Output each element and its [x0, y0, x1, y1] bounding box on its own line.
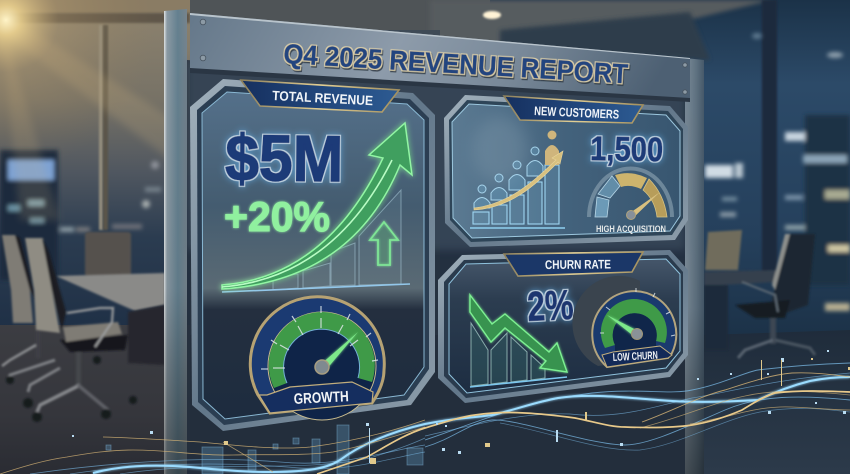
display stand posts — [164, 9, 704, 474]
value: +20%: +20% — [224, 193, 330, 240]
data particles — [72, 350, 846, 463]
bar chart: declining bars — [471, 323, 545, 386]
panel: new customers — [444, 95, 688, 247]
banner: new customers — [504, 96, 643, 123]
gauge: high acquisition — [589, 168, 672, 235]
title: Q4 2025 REVENUE REPORT — [283, 38, 629, 89]
bar chart: customer growth with people icons — [470, 130, 565, 228]
glass board behind panels — [187, 60, 685, 474]
blue streams — [30, 363, 850, 474]
floor — [0, 325, 190, 474]
bar chart: growth bars — [273, 190, 401, 290]
panel: total revenue — [190, 79, 435, 431]
left post — [164, 9, 187, 474]
chair rear — [2, 235, 40, 366]
value: 2%: 2% — [526, 281, 574, 330]
banner: new customers: NEW CUSTOMERS — [534, 104, 619, 122]
plate bolts — [200, 19, 687, 94]
blurred city lights right — [705, 33, 850, 311]
arrow: falling trend — [470, 295, 567, 372]
arrow: big growth arrow — [222, 123, 412, 289]
main gold stream — [317, 391, 850, 474]
sunlight rays — [0, 0, 190, 220]
conference table and chairs right — [704, 230, 815, 358]
panel frame — [438, 250, 688, 403]
value: 1,500: 1,500 — [590, 130, 664, 169]
baseline — [222, 284, 410, 292]
main blue stream — [93, 377, 850, 473]
banner: total revenue — [241, 80, 399, 112]
gold streams — [0, 373, 850, 474]
banner: total revenue: TOTAL REVENUE — [272, 88, 373, 108]
conference table and chairs left — [2, 232, 165, 422]
faint data bars — [106, 425, 423, 474]
banner: churn rate: CHURN RATE — [545, 257, 611, 272]
gauge label: HIGH ACQUISITION — [596, 224, 666, 235]
header plate — [190, 13, 690, 102]
arrow: gold trend — [474, 151, 563, 210]
gold particles — [224, 358, 850, 464]
panel frame — [444, 95, 688, 247]
chair front — [6, 238, 137, 422]
banner: churn rate — [504, 252, 643, 276]
gauge: low churn — [572, 276, 676, 367]
gauge: growth — [250, 297, 384, 420]
value: $5M: $5M — [225, 121, 344, 195]
gauge label: GROWTH — [293, 388, 349, 408]
icon: small up arrow — [370, 222, 398, 265]
panel: churn rate — [438, 250, 688, 403]
panel frame — [190, 79, 435, 431]
icon: gold person — [545, 130, 559, 165]
blurred city lights left — [0, 150, 161, 280]
data wave streams — [0, 350, 850, 474]
right post — [685, 58, 704, 474]
window mullions — [99, 0, 777, 280]
gauge label: LOW CHURN — [613, 350, 658, 364]
